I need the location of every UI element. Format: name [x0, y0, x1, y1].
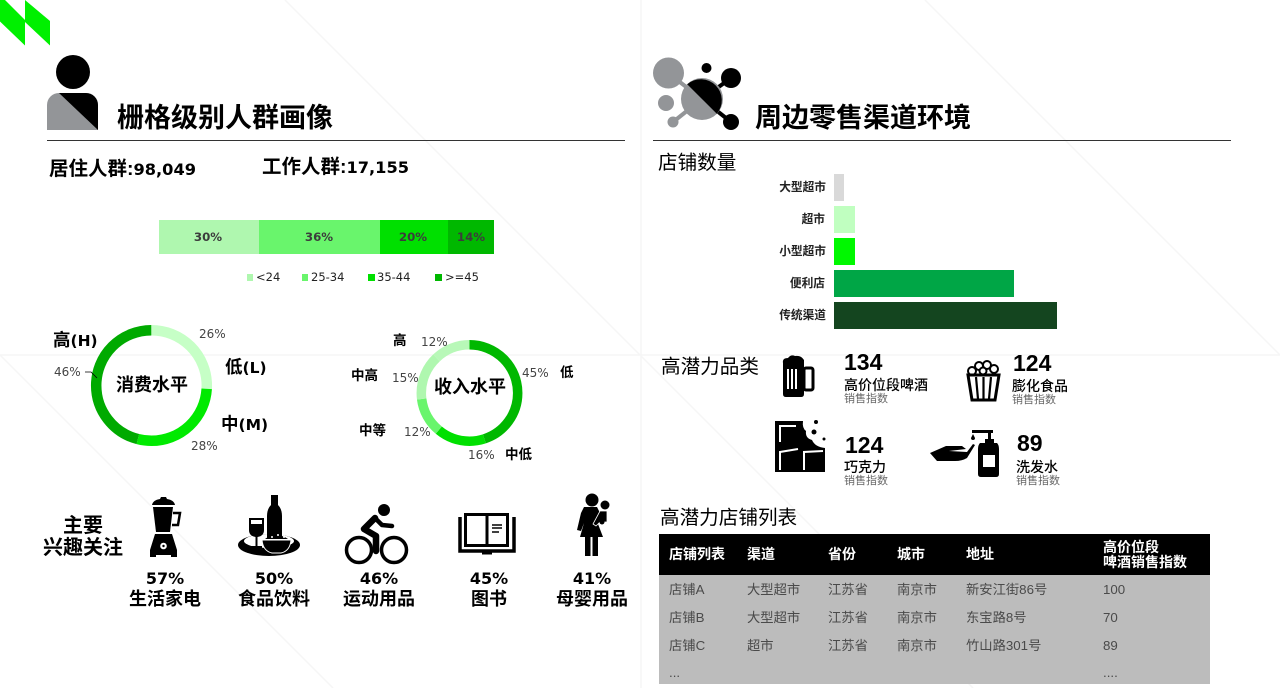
chart: income level donut: 15%: [392, 371, 419, 385]
category: puffed food: 销售指数: [1012, 392, 1056, 406]
table: store list: 大型超市: [747, 609, 800, 625]
table: store list: 地址: [966, 546, 994, 562]
legend: age: 25-34: [311, 270, 344, 284]
legend: age: >=45: [445, 270, 479, 284]
category: chocolate: [775, 420, 888, 487]
chart: income level donut: 45%: [522, 366, 549, 380]
icon: network nodes: [653, 58, 741, 130]
legend: age: [247, 270, 479, 284]
chart: store count bars: 传统渠道: [779, 308, 826, 322]
logo: green chevrons: [0, 0, 50, 46]
table: store list: 南京市: [897, 609, 937, 625]
category: shampoo: 洗发水: [1016, 459, 1058, 475]
heading: high potential stores: 高潜力店铺列表: [660, 507, 797, 529]
heading: main interests: 兴趣关注: [43, 536, 123, 559]
interest: food and drink: 50%: [255, 569, 293, 588]
chart: consumption level donut: 中(M): [221, 414, 268, 434]
chart: income level donut: 中高: [351, 367, 378, 383]
category: premium beer: 销售指数: [844, 391, 888, 405]
table: store list: 渠道: [747, 546, 775, 562]
chart: income level donut: [351, 332, 574, 462]
icon: open book: [460, 514, 514, 554]
interest: home appliances: 57%: [146, 569, 184, 588]
category: shampoo: [930, 430, 1060, 487]
chart: age stacked bar: 14%: [457, 230, 485, 244]
table: store list: 江苏省: [828, 582, 868, 597]
chart: income level donut: 中等: [359, 422, 386, 438]
heading: main interests: 主要: [63, 514, 103, 537]
chart: consumption level donut: 46%: [54, 365, 81, 379]
category: shampoo: 89: [1017, 430, 1043, 456]
legend: age: <24: [256, 270, 280, 284]
working population: 工作人群:17,155: [262, 156, 409, 178]
chart: age stacked bar: 36%: [305, 230, 333, 244]
category: chocolate: 124: [845, 432, 884, 458]
table: store list: 超市: [747, 637, 774, 653]
table: store list: 城市: [897, 546, 925, 562]
table: store list: 70: [1103, 610, 1118, 625]
chart: income level donut: 12%: [404, 425, 431, 439]
interest: home appliances: [129, 497, 201, 609]
chart: consumption level donut: 26%: [199, 327, 226, 341]
panel: population profile: [43, 55, 628, 609]
interest: sporting goods: 46%: [360, 569, 398, 588]
icon: wine and meal: [238, 495, 300, 556]
heading: store count: 店铺数量: [658, 152, 736, 174]
table: store list: 省份: [828, 546, 856, 562]
chart: store count bars: 便利店: [790, 276, 825, 290]
table: store list: 竹山路301号: [966, 638, 1041, 653]
interest: sporting goods: [343, 504, 415, 609]
chart: income level donut: 低: [560, 364, 574, 380]
table: store list: ....: [1103, 665, 1118, 680]
interest: mother and baby: 母婴用品: [556, 589, 628, 609]
chart: age stacked bar: 30%: [194, 230, 222, 244]
chart: age stacked bar: [159, 220, 494, 254]
icon: popcorn: [968, 361, 999, 400]
chart: store count bars: [779, 174, 1057, 329]
interest: mother and baby: [556, 494, 628, 609]
table: store list: 店铺列表: [669, 546, 725, 562]
heading: population profile: 栅格级别人群画像: [117, 103, 333, 133]
category: puffed food: 124: [1013, 350, 1052, 376]
category: puffed food: [968, 350, 1068, 406]
chart: age stacked bar: 20%: [399, 230, 427, 244]
icon: beer mug: [783, 355, 813, 397]
table: store list: 江苏省: [828, 610, 868, 625]
table: store list: 啤酒销售指数: [1103, 554, 1187, 570]
chart: income level donut: 12%: [421, 335, 448, 349]
chart: income level donut: 中低: [505, 446, 532, 462]
heading: main interests: [43, 514, 123, 559]
table: store list: [659, 534, 1210, 684]
category: chocolate: 巧克力: [844, 459, 886, 475]
panel: retail channel environment: [653, 58, 1231, 684]
chart: consumption level donut: 消费水平: [116, 375, 188, 395]
residential population: 居住人群:98,049: [49, 158, 196, 180]
interest: food and drink: 食品饮料: [238, 588, 310, 609]
interest: books: 图书: [471, 589, 507, 609]
icon: cyclist: [346, 504, 406, 562]
chart: consumption level donut: 低(L): [225, 357, 267, 377]
interest: books: 45%: [470, 569, 508, 588]
category: chocolate: 销售指数: [844, 473, 888, 487]
table: store list: 店铺C: [669, 638, 706, 653]
category: shampoo: 销售指数: [1016, 473, 1060, 487]
chart: store count bars: 小型超市: [779, 244, 826, 258]
interest: home appliances: 生活家电: [129, 588, 201, 609]
table: store list: 89: [1103, 638, 1118, 653]
category: premium beer: 高价位段啤酒: [844, 377, 928, 393]
table: store list: 100: [1103, 582, 1125, 597]
table: store list: 高价位段: [1103, 539, 1159, 555]
table: store list: 大型超市: [747, 581, 800, 597]
chart: store count bars: 大型超市: [779, 180, 826, 194]
table: store list: 南京市: [897, 581, 937, 597]
legend: age: 35-44: [377, 270, 410, 284]
heading: retail channels: 周边零售渠道环境: [755, 103, 971, 133]
category: premium beer: [783, 349, 928, 405]
interest: sporting goods: 运动用品: [343, 589, 415, 609]
table: store list: 店铺A: [669, 582, 705, 597]
table: store list: ...: [669, 665, 680, 680]
table: store list: 东宝路8号: [966, 610, 1027, 625]
table: store list: 新安江街86号: [966, 582, 1047, 597]
icon: person: [47, 55, 98, 130]
table: store list: 店铺B: [669, 610, 705, 625]
icon: chocolate bar: [775, 420, 826, 472]
interest: books: [460, 514, 514, 609]
icon: hand and pump bottle: [930, 430, 999, 477]
chart: consumption level donut: 28%: [191, 439, 218, 453]
interest: food and drink: [238, 495, 310, 609]
chart: consumption level donut: [53, 327, 268, 453]
chart: income level donut: 16%: [468, 448, 495, 462]
heading: high potential categories: 高潜力品类: [661, 356, 759, 378]
chart: income level donut: 收入水平: [434, 377, 506, 397]
table: store list: 江苏省: [828, 638, 868, 653]
chart: store count bars: 超市: [802, 212, 825, 226]
chart: consumption level donut: 高(H): [53, 330, 98, 350]
table: store list: 南京市: [897, 637, 937, 653]
chart: income level donut: 高: [393, 332, 406, 348]
category: puffed food: 膨化食品: [1012, 378, 1068, 394]
category: premium beer: 134: [844, 349, 883, 375]
icon: mother carrying baby: [577, 494, 610, 556]
icon: blender: [150, 497, 180, 557]
interest: mother and baby: 41%: [573, 569, 611, 588]
